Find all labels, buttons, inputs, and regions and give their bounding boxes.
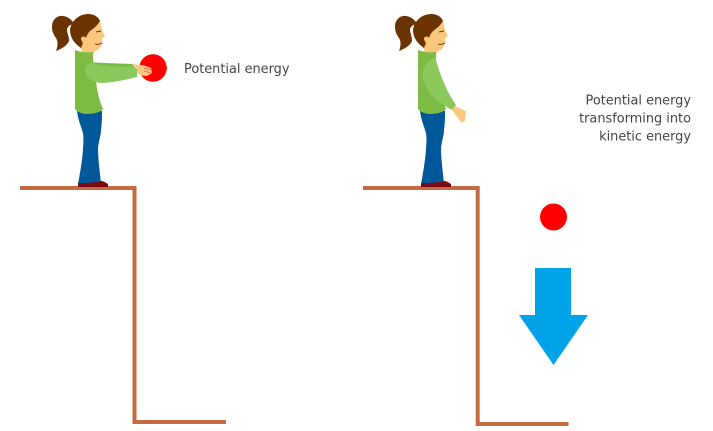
lowered arm xyxy=(423,57,456,110)
hand xyxy=(132,64,152,76)
left ledge and cliff xyxy=(20,188,226,422)
open hand xyxy=(452,106,466,122)
right ledge and cliff xyxy=(363,188,568,424)
falling ball xyxy=(540,204,567,230)
left woman holding the ball xyxy=(52,14,167,187)
label: transforming energy: kinetic energy xyxy=(599,130,691,144)
outstretched arm xyxy=(85,63,137,83)
ball held in hands xyxy=(139,54,167,82)
right woman with arms lowered xyxy=(395,14,466,187)
label: transforming energy: Potential energy xyxy=(586,94,691,108)
downward arrow xyxy=(519,268,588,365)
label: transforming energy: transforming into xyxy=(579,112,691,126)
label: potential energy: Potential energy xyxy=(184,62,290,77)
label: transforming energy xyxy=(579,94,691,144)
